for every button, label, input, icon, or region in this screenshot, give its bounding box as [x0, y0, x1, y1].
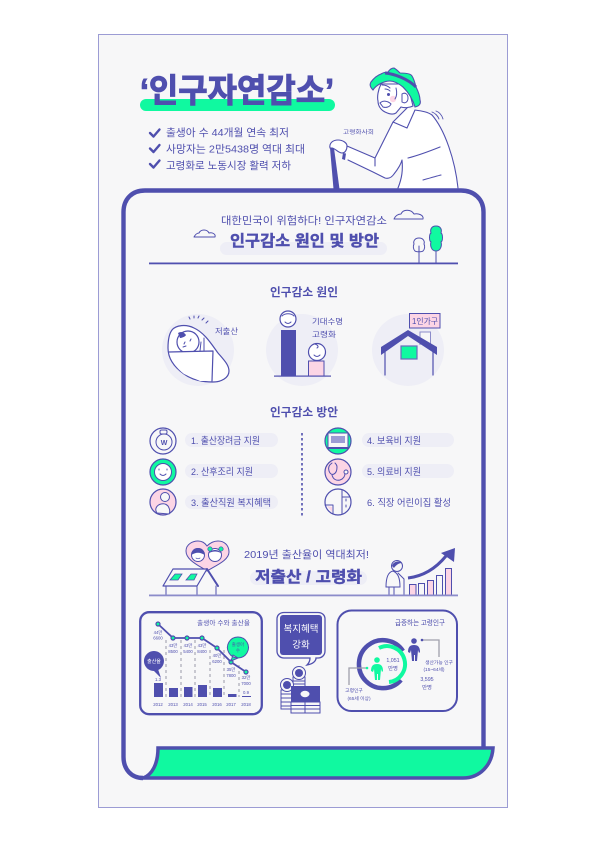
banner heading: 저출산 / 고령화	[255, 568, 362, 586]
solution 3: employee welfare	[150, 489, 278, 515]
panel: births and fertility chart: 43만	[169, 642, 177, 648]
panel: births and fertility chart: 출생아 수와 출산율	[197, 618, 250, 627]
solution 5: medical cost: 5. 의료비 지원	[367, 467, 421, 478]
banner: rising bar chart and arrow	[408, 548, 455, 595]
key points checklist: 사망자는 2만5438명 역대 최대	[166, 144, 305, 156]
panel: births and fertility chart: 2017	[226, 702, 236, 707]
key points checklist: 고령화로 노동시장 활력 저하	[166, 159, 291, 172]
solution 6: workplace daycare	[325, 489, 451, 515]
panel: births and fertility chart: 2015	[197, 702, 207, 707]
panel: rapidly growing elderly population: 고령인구	[345, 687, 363, 694]
banner text: record low birth rate: 2019년 출산율이 역대최저!	[244, 549, 369, 561]
panel: births and fertility chart	[140, 612, 262, 714]
panel: births and fertility chart: 8500	[168, 649, 178, 654]
panel: rapidly growing elderly population: 생산가능 인구	[425, 659, 453, 666]
cause: life expectancy bars: 고령화	[312, 330, 336, 339]
solution 5: medical cost	[325, 459, 454, 485]
panel: births and fertility chart: 32만	[242, 674, 250, 680]
solution 2: postpartum care	[150, 459, 278, 485]
section heading: solutions: 인구감소 방안	[270, 406, 338, 419]
icon: clouds	[194, 210, 423, 237]
cause: single-person household house: 1인가구	[412, 316, 438, 326]
solution 1: birth grant	[150, 428, 278, 454]
section heading: causes: 인구감소 원인	[270, 285, 338, 299]
cause: low birth rate baby	[162, 314, 239, 386]
panel: births and fertility chart: 2013	[168, 702, 178, 707]
solution 1: birth grant: W	[161, 440, 168, 447]
banner: heart and house illustration	[163, 541, 229, 595]
panel: births and fertility chart: 2014	[183, 702, 193, 707]
speech bubble: strengthen welfare: 강화	[292, 640, 310, 651]
sub heading: 대한민국이 위험하다! 인구자연감소	[221, 214, 387, 227]
panel: births and fertility chart: 출산율	[147, 658, 161, 665]
panel: births and fertility chart: 0.9	[243, 690, 250, 695]
panel: rapidly growing elderly population: 1,051	[386, 658, 400, 664]
panel: births and fertility chart: 5400	[183, 649, 193, 654]
panel: births and fertility chart: 35만	[227, 666, 235, 672]
panel: births and fertility chart: 2018	[241, 702, 251, 707]
panel: rapidly growing elderly population: 3,595	[420, 677, 434, 683]
panel: births and fertility chart: 1.3	[155, 677, 162, 682]
solution 3: employee welfare: 3. 출산직원 복지혜택	[191, 497, 271, 509]
cause: low birth rate baby: 저출산	[215, 326, 239, 336]
cause: single-person household house	[372, 314, 444, 386]
banner baseline	[149, 594, 458, 596]
panel: births and fertility chart: 6600	[153, 636, 163, 640]
panel: births and fertility chart: 8400	[197, 649, 207, 654]
cause: life expectancy bars: 기대수명	[312, 316, 343, 326]
icon: coins and banknotes	[280, 666, 320, 713]
panel: births and fertility chart: 출생아	[232, 641, 245, 648]
key points checklist	[150, 127, 305, 172]
solution 2: postpartum care: 2. 산후조리 지원	[191, 467, 253, 478]
cause: life expectancy bars	[266, 311, 343, 386]
panel: births and fertility chart: 44만	[154, 629, 162, 635]
icon: trees	[413, 226, 442, 263]
illustration: elderly man with cane	[330, 68, 458, 189]
panel: rapidly growing elderly population: 만명	[422, 683, 432, 691]
speech bubble: strengthen welfare: 복지혜택	[284, 623, 318, 635]
solution 4: childcare allowance	[325, 428, 454, 454]
divider	[149, 262, 458, 264]
main heading	[220, 232, 387, 255]
panel: rapidly growing elderly population: 만명	[388, 664, 398, 672]
panel: births and fertility chart: 43만	[198, 642, 206, 648]
panel: births and fertility chart: 7800	[226, 673, 236, 678]
dashed separator	[301, 433, 303, 517]
panel: rapidly growing elderly population: 급증하는 고령인구	[395, 618, 446, 627]
panel: births and fertility chart: 수	[236, 648, 240, 654]
banner: elderly figure	[386, 560, 404, 595]
scroll frame	[124, 190, 484, 778]
panel: births and fertility chart: 6200	[212, 659, 222, 664]
main heading: 인구감소 원인 및 방안	[230, 232, 379, 250]
panel: births and fertility chart: 43만	[184, 642, 192, 648]
key points checklist: 출생아 수 44개월 연속 최저	[166, 127, 289, 139]
panel: rapidly growing elderly population: (15~64세)	[423, 666, 445, 673]
solution 4: childcare allowance: 4. 보육비 지원	[367, 436, 421, 447]
panel: births and fertility chart: 2012	[153, 702, 163, 707]
title: ‘인구자연감소’	[140, 72, 334, 109]
solution 1: birth grant: 1. 출산장려금 지원	[191, 435, 260, 447]
panel: rapidly growing elderly population	[338, 610, 457, 711]
label: aging society: 고령화사회	[343, 128, 374, 136]
solution 6: workplace daycare: 6. 직장 어린이집 활성	[367, 497, 451, 509]
panel: births and fertility chart: 7000	[241, 681, 251, 686]
speech bubble: strengthen welfare	[277, 612, 325, 665]
scroll curl: green band	[143, 748, 493, 778]
panel: births and fertility chart: 40만	[213, 652, 221, 658]
page background	[98, 34, 508, 808]
panel: rapidly growing elderly population: (65세 이상)	[347, 695, 371, 702]
panel: births and fertility chart: 2016	[212, 702, 222, 707]
